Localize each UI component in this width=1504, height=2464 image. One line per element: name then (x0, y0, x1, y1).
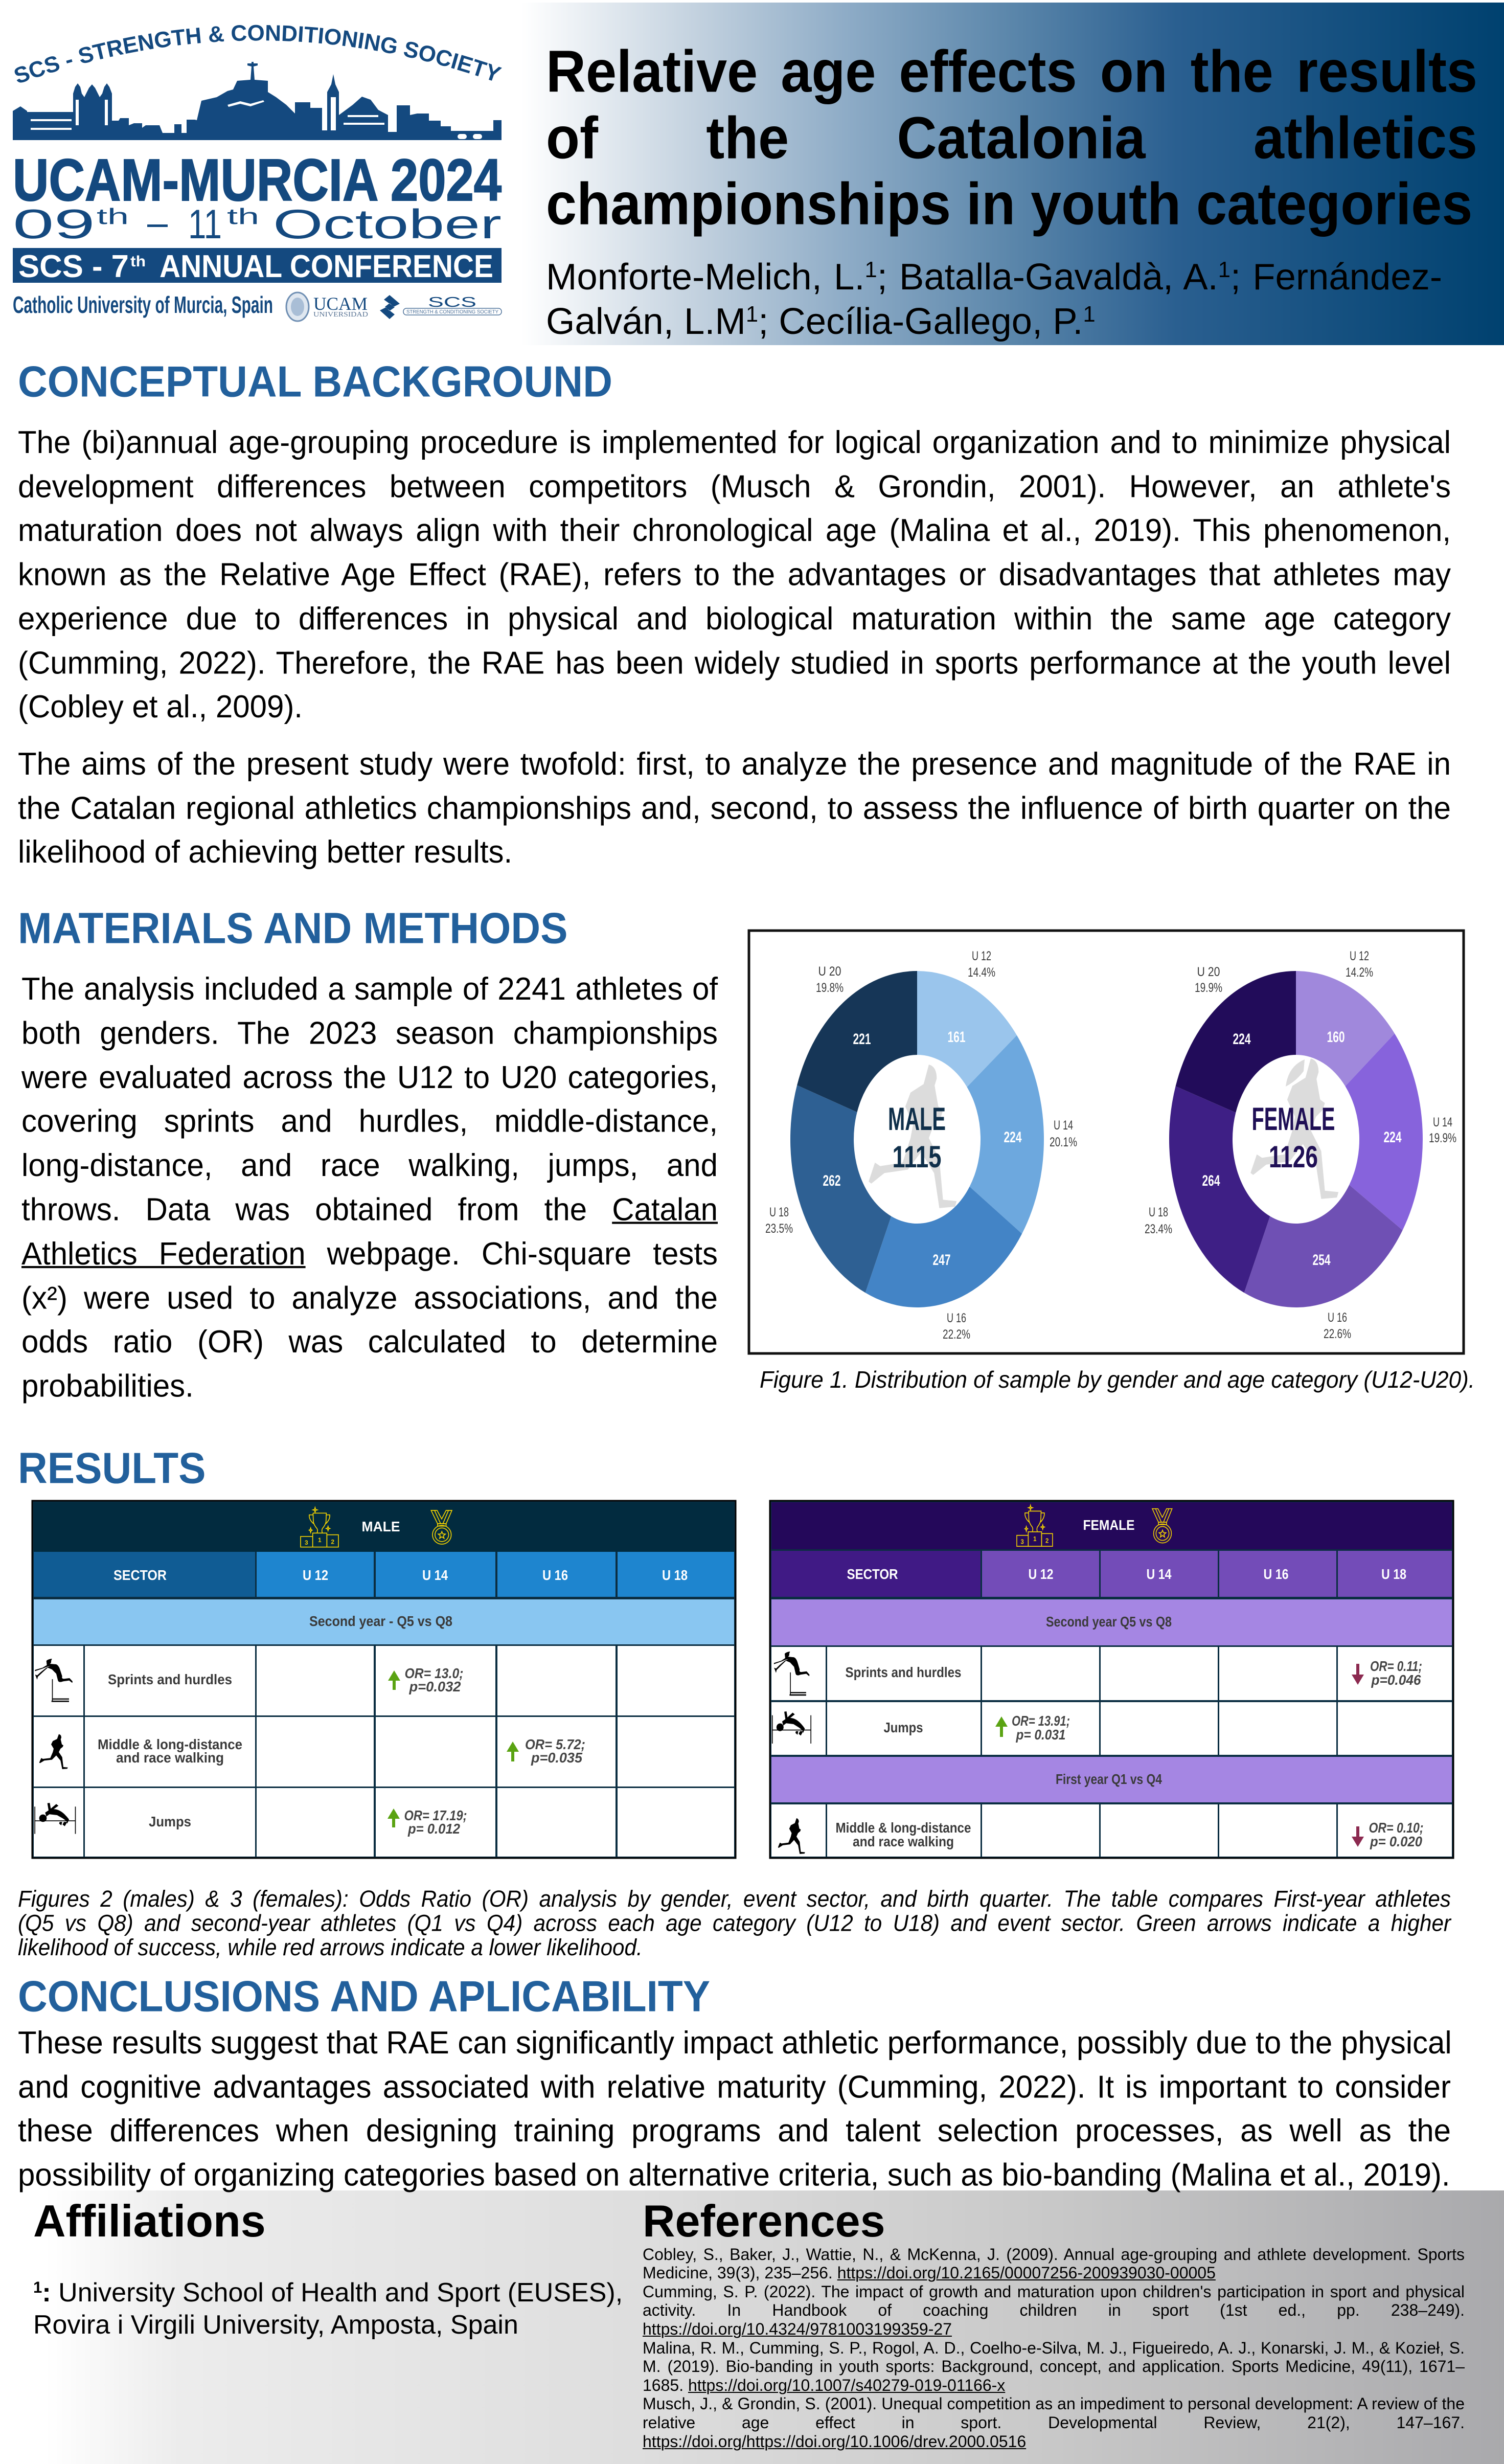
icon: trophy on podium (1017, 1505, 1053, 1546)
row label: middle and long distance: and race walking (853, 1834, 954, 1849)
female donut labels: U 16 (1328, 1310, 1347, 1325)
text block: methods paragraph: The analysis included a sample of 2241 athletes of (21, 971, 718, 1007)
text block: methods paragraph (21, 971, 718, 1404)
footer gradient band (0, 2190, 1504, 2464)
icon: hurdler (35, 1659, 73, 1702)
table header labels: SECTOR (113, 1567, 167, 1583)
text block: background paragraph: experience due to differences in physical and biological maturation within the same age category (18, 601, 1451, 637)
logo skyline (13, 62, 502, 140)
logo dates: th (227, 204, 259, 229)
icon: female runner silhouette (1250, 1058, 1338, 1199)
text block: background paragraph: development differences between competitors (Musch & Grondin, 2001). However, an athlete's (18, 469, 1451, 504)
row label: middle and long distance (835, 1820, 971, 1849)
logo conference band: th (130, 253, 146, 270)
female donut labels: 224 (1383, 1129, 1402, 1146)
table header labels (113, 1567, 688, 1583)
text block: conclusions paragraph: these differences when designing training programs and talent selection processes, as well as the (18, 2113, 1451, 2149)
logo SCS mark (380, 294, 502, 319)
icon: trophy on podium: 1 (318, 1536, 322, 1544)
female donut labels: 160 (1327, 1029, 1345, 1046)
text block: references: Cobley, S., Baker, J., Wattie, N., & McKenna, J. (2009). Annual age-grouping and athlete development. Sports (643, 2245, 1465, 2264)
table header labels: U 12 (303, 1567, 328, 1583)
text block: aims paragraph: The aims of the present study were twofold: first, to analyze the presence and magnitude of the RAE in (18, 746, 1451, 781)
result: U12 jumps: OR= 13.91; (1012, 1713, 1070, 1729)
result: U18 middle distance: OR= 0.10; (1369, 1820, 1423, 1836)
logo dates (13, 201, 502, 247)
table header labels: U 18 (662, 1567, 688, 1583)
text block: references: Musch, J., & Grondin, S. (2001). Unequal competition as an impediment to personal development: A review of the (643, 2394, 1465, 2413)
conference logo: SCS - STRENGTH & CONDITIONING SOCIETY (14, 25, 502, 83)
text block: methods paragraph: covering sprints and hurdles, middle-distance, (21, 1104, 718, 1139)
male donut labels: 224 (1004, 1129, 1022, 1146)
text block: affiliations: Rovira i Virgili University, Amposta, Spain (33, 2310, 518, 2340)
icon: medal (431, 1510, 452, 1544)
table title: female: FEMALE (1083, 1517, 1135, 1533)
text block: methods paragraph: long-distance, and race walking, jumps, and (21, 1148, 718, 1183)
row label: sprints: Sprints and hurdles (108, 1671, 232, 1687)
logo university line: Catholic University of Murcia, Spain (13, 291, 273, 318)
male donut labels: 22.2% (943, 1327, 970, 1342)
male donut labels: 221 (853, 1031, 871, 1048)
donut chart: female (1169, 971, 1423, 1307)
authors (546, 256, 1442, 342)
table header labels: U 18 (1381, 1566, 1406, 1582)
logo event name: UCAM-MURCIA 2024 (13, 147, 502, 213)
result: U14 sprints: OR= 13.0; (405, 1665, 463, 1681)
male donut labels: 20.1% (1050, 1135, 1077, 1149)
logo UCAM seal: UNIVERSIDAD (313, 311, 368, 319)
text block: references: Malina, R. M., Cumming, S. P., Rogol, A. D., Coelho-e-Silva, M. J., Figueiredo, A. J., Konarski, J. M., & Kozieł, S. (643, 2339, 1465, 2357)
text block: background paragraph: known as the Relative Age Effect (RAE), refers to the advantages or disadvantages that athletes may (18, 557, 1451, 592)
icon: trophy on podium: 1 (1033, 1535, 1037, 1543)
text block: background paragraph: (Cobley et al., 2009). (18, 689, 303, 725)
title (546, 38, 1477, 237)
female donut labels: U 12 (1350, 949, 1369, 963)
result: U18 middle distance (1352, 1820, 1423, 1849)
male donut labels: 1115 (893, 1140, 942, 1174)
caption: figure 1: Figure 1. Distribution of sample by gender and age category (U12-U20). (760, 1367, 1475, 1393)
authors: Monforte-Melich, L.1; Batalla-Gavaldà, A.1; Fernández- (546, 256, 1442, 298)
text block: aims paragraph: the Catalan regional athletics championships and, second, to assess the influence of birth quarter on the (18, 790, 1451, 825)
text block: background paragraph: maturation does not always align with their chronological age (Malina et al., 2019). This phenomenon, (18, 513, 1451, 548)
male donut labels: 247 (932, 1252, 951, 1269)
panel: male results table (32, 1501, 736, 1858)
donut chart: male (790, 971, 1044, 1307)
logo conference band: ANNUAL CONFERENCE (159, 249, 493, 284)
male donut labels: U 18 (769, 1205, 789, 1219)
text block: references: M. (2019). Bio-banding in youth sports: Background, concept, and application. Sports Medicine, 49(11), 1671– (643, 2357, 1465, 2376)
female donut labels: 264 (1202, 1172, 1220, 1189)
text block: methods paragraph: Athletics Federation webpage. Chi-square tests (21, 1236, 718, 1272)
authors: Galván, L.M1; Cecília-Gallego, P.1 (546, 301, 1096, 342)
caption: figures 2 and 3: Figures 2 (males) & 3 (females): Odds Ratio (OR) analysis by gender, event sector, and birth quarter. The table compares First-year athletes (18, 1886, 1451, 1912)
conference logo (11, 20, 504, 321)
title: of the Catalonia athletics (546, 104, 1477, 171)
text block: affiliations: 1: University School of Health and Sport (EUSES), (33, 2278, 623, 2308)
female donut labels: 23.4% (1145, 1222, 1172, 1236)
row label: middle and long distance (98, 1736, 242, 1766)
table header labels (847, 1566, 1406, 1582)
heading: conclusions: CONCLUSIONS AND APLICABILITY (18, 1972, 710, 2020)
caption: figures 2 and 3: likelihood of success, while red arrows indicate a lower likelihood. (18, 1934, 643, 1960)
heading: conceptual background: CONCEPTUAL BACKGROUND (18, 357, 612, 405)
text block: methods paragraph: odds ratio (OR) was calculated to determine (21, 1324, 718, 1360)
male donut labels: U 16 (947, 1311, 966, 1325)
result: U14 sprints: p=0.032 (409, 1679, 461, 1694)
text block: conclusions paragraph (18, 2025, 1452, 2192)
result: U18 sprints: OR= 0.11; (1370, 1658, 1422, 1674)
icon: trophy on podium: 2 (331, 1538, 334, 1545)
logo UCAM seal (286, 292, 368, 321)
logo UCAM seal: UCAM (313, 293, 368, 314)
female donut labels: 1126 (1269, 1140, 1318, 1174)
text block: methods paragraph: both genders. The 2023 season championships (21, 1015, 718, 1051)
male donut labels: U 12 (972, 949, 991, 963)
text block: references: https://doi.org/https://doi.org/10.1006/drev.2000.0516 (643, 2432, 1026, 2451)
panel: figure 1 donut charts (749, 931, 1464, 1353)
text block: references (643, 2245, 1465, 2451)
result: U14 sprints (388, 1665, 463, 1694)
male donut labels: 262 (823, 1172, 840, 1189)
result: U12 jumps (995, 1713, 1070, 1743)
icon: high jumper (772, 1711, 811, 1744)
result: U16 middle distance (507, 1736, 585, 1766)
text block: conclusions paragraph: These results suggest that RAE can significantly impact athletic performance, possibly due to the physical (18, 2025, 1452, 2060)
result: U14 jumps: p= 0.012 (407, 1821, 460, 1837)
table header labels: U 16 (542, 1567, 568, 1583)
text block: aims paragraph (18, 746, 1451, 870)
icon: trophy on podium: 2 (1045, 1537, 1049, 1545)
logo dates: 09 (13, 201, 95, 247)
logo dates: 11 (188, 201, 222, 247)
male donut labels: U 14 (1054, 1118, 1073, 1133)
text block: references: 1685. https://doi.org/10.1007/s40279-019-01166-x (643, 2376, 1005, 2394)
heading: results: RESULTS (18, 1443, 206, 1492)
female donut labels (1145, 949, 1456, 1341)
heading: affiliations: Affiliations (33, 2196, 266, 2246)
icon: trophy on podium: 3 (305, 1539, 308, 1546)
heading: references: References (643, 2196, 885, 2246)
female donut labels: 19.9% (1429, 1131, 1456, 1145)
panel: female results table (770, 1501, 1453, 1858)
text block: background paragraph (18, 425, 1451, 725)
icon: male runner silhouette (869, 1065, 956, 1208)
result: U18 sprints (1352, 1658, 1422, 1688)
table header labels: U 16 (1264, 1566, 1288, 1582)
female donut labels: U 14 (1433, 1115, 1452, 1129)
text block: methods paragraph: were evaluated across the U12 to U20 categories, (21, 1059, 718, 1095)
logo SCS mark: STRENGTH & CONDITIONING SOCIETY (406, 309, 498, 315)
text block: references: https://doi.org/10.4324/9781003199359-27 (643, 2320, 952, 2338)
text block: references: activity. In Handbook of coaching children in sport (1st ed., pp. 238–249). (643, 2301, 1465, 2319)
male donut labels: MALE (888, 1101, 946, 1137)
text block: references: Cumming, S. P. (2022). The impact of growth and maturation upon children's participation in sport and physical (643, 2282, 1465, 2301)
female donut labels: 22.6% (1324, 1327, 1351, 1341)
result: U14 jumps (388, 1807, 467, 1837)
band: first year: First year Q1 vs Q4 (1056, 1771, 1162, 1787)
row label: sprints: Sprints and hurdles (846, 1664, 961, 1680)
result: U12 jumps: p= 0.031 (1016, 1727, 1065, 1743)
result: U18 middle distance: p= 0.020 (1370, 1834, 1422, 1849)
title: Relative age effects on the results (546, 38, 1477, 104)
male donut labels: 23.5% (765, 1222, 793, 1236)
text block: aims paragraph: likelihood of achieving better results. (18, 834, 512, 870)
male donut labels: 19.8% (816, 981, 844, 995)
male donut labels: 161 (948, 1029, 965, 1046)
female donut labels: 14.2% (1346, 965, 1373, 980)
result: U14 jumps: OR= 17.19; (404, 1807, 467, 1823)
female donut labels: U 20 (1197, 965, 1220, 979)
result: U18 sprints: p=0.046 (1371, 1672, 1421, 1688)
icon: medal (1152, 1509, 1172, 1543)
icon: high jumper (34, 1803, 76, 1834)
female donut labels: U 18 (1149, 1205, 1168, 1219)
heading: materials and methods: MATERIALS AND METHODS (18, 903, 568, 952)
text block: references: relative age effect in sport. Developmental Review, 21(2), 147–167. (643, 2413, 1465, 2432)
icon: runner (778, 1818, 805, 1854)
logo SCS mark: SCS (428, 294, 476, 310)
logo dates: October (273, 201, 502, 247)
row label: jumps: Jumps (149, 1814, 191, 1829)
female donut labels: 19.9% (1195, 981, 1222, 995)
text block: affiliations (33, 2278, 623, 2340)
female donut labels: FEMALE (1251, 1101, 1335, 1137)
table title: male: MALE (362, 1519, 400, 1534)
table header labels: U 12 (1029, 1566, 1053, 1582)
text block: methods paragraph: throws. Data was obtained from the Catalan (21, 1192, 718, 1227)
row label: middle and long distance: Middle & long-distance (835, 1820, 971, 1836)
band: second year: Second year Q5 vs Q8 (1046, 1614, 1172, 1630)
text block: conclusions paragraph: and cognitive advantages associated with relative maturity (Cumming, 2022). It is important to consider (18, 2069, 1451, 2104)
table header labels: U 14 (1146, 1566, 1172, 1582)
text block: background paragraph: (Cumming, 2022). Therefore, the RAE has been widely studied in sports performance at the youth level (18, 645, 1451, 681)
icon: runner (39, 1734, 68, 1769)
logo conference band: SCS - 7 (18, 249, 129, 284)
male donut labels: U 20 (818, 964, 841, 979)
caption: figures 2 and 3: (Q5 vs Q8) and second-year athletes (Q1 vs Q4) across each age category (U12 to U18) and event sector. Green arrows indicate a higher (18, 1910, 1451, 1936)
female donut labels: 224 (1233, 1031, 1251, 1048)
row label: middle and long distance: and race walking (116, 1750, 224, 1766)
male donut labels: 14.4% (968, 965, 995, 980)
male donut labels (765, 949, 1077, 1342)
table header labels: SECTOR (847, 1566, 898, 1582)
text block: background paragraph: The (bi)annual age-grouping procedure is implemented for logical organization and to minimize physical (18, 425, 1451, 460)
row label: jumps: Jumps (883, 1720, 923, 1735)
logo conference band (13, 248, 502, 284)
row label: middle and long distance: Middle & long-distance (98, 1736, 242, 1752)
table header labels: U 14 (422, 1567, 448, 1583)
text block: methods paragraph: probabilities. (21, 1368, 194, 1404)
result: U16 middle distance: p=0.035 (531, 1750, 582, 1766)
icon: trophy on podium (301, 1507, 338, 1547)
header gradient banner (511, 3, 1504, 345)
result: U16 middle distance: OR= 5.72; (525, 1736, 585, 1752)
band: second year: Second year - Q5 vs Q8 (309, 1613, 452, 1629)
text block: conclusions paragraph: possibility of organizing categories based on alternative criteria, such as bio-banding (Malina et al., 2019). (18, 2157, 1450, 2192)
logo dates: th (97, 204, 129, 229)
female donut labels: 254 (1313, 1252, 1331, 1269)
icon: trophy on podium: 3 (1021, 1538, 1024, 1546)
text block: references: Medicine, 39(3), 235–256. https://doi.org/10.2165/00007256-200939030-00005 (643, 2264, 1216, 2282)
title: championships in youth categories (546, 170, 1472, 237)
icon: hurdler (774, 1652, 809, 1696)
caption: figures 2 and 3 (18, 1886, 1452, 1960)
text block: methods paragraph: (x²) were used to analyze associations, and the (21, 1280, 718, 1316)
